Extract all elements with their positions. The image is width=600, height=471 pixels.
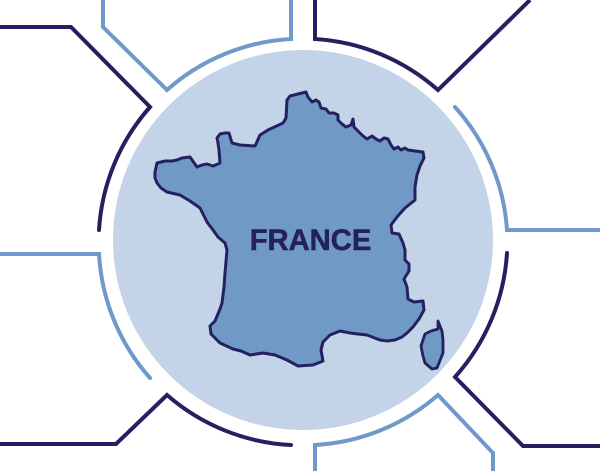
connector: left upper panel outline [0, 27, 150, 230]
central circle [113, 50, 493, 430]
label: FRANCE: FRANCE [250, 225, 371, 257]
connector: left lower panel outline [0, 254, 150, 378]
map: Corsica [421, 321, 443, 369]
connector: right lower panel outline [455, 253, 600, 446]
connector: bottom left panel outline [0, 395, 291, 445]
connector: top right panel outline [315, 0, 530, 90]
connector: right upper panel outline [455, 107, 600, 230]
connector: top left panel outline [103, 0, 291, 90]
connector: bottom right panel outline [315, 395, 493, 471]
map: mainland France [155, 92, 424, 366]
